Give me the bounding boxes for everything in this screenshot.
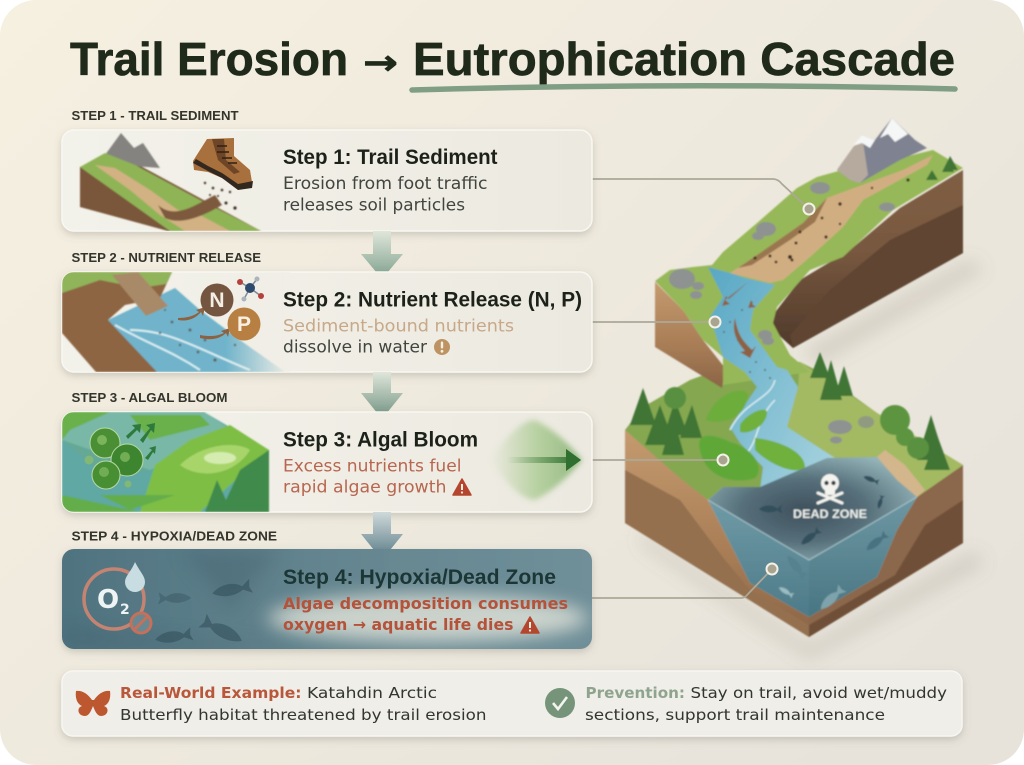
panel: step 2 nutrient release: [62, 272, 592, 372]
trees: [630, 156, 958, 470]
label: step 2: STEP 2 - NUTRIENT RELEASE: [72, 251, 261, 265]
thumbnail: algae water: [62, 412, 269, 512]
panel: step 4 hypoxia: [62, 549, 592, 649]
panel: step 3 algal bloom: rapid algae growth: [283, 478, 446, 496]
icon: oxygen depleted: O: [97, 585, 119, 615]
icon: nitrogen: N: [209, 289, 225, 312]
panel: example and prevention: [62, 671, 962, 736]
lower block: soil faces: [625, 430, 963, 637]
icon: oxygen depleted: 2: [120, 602, 130, 618]
mountain: [837, 118, 927, 183]
dead zone mark: DEAD ZONE: [793, 509, 867, 521]
heading and text: Step 4: Hypoxia/Dead Zone: [283, 566, 556, 589]
icon: nitrogen: [200, 284, 234, 316]
prevention text: sections, support trail maintenance: [585, 706, 885, 724]
arrow: step 3 to 4: [361, 512, 403, 560]
prevention text: Prevention:: [586, 684, 685, 702]
example text: Butterfly habitat threatened by trail erosion: [120, 706, 486, 724]
title: →: [363, 43, 398, 83]
prevention text: Stay on trail, avoid wet/muddy: [690, 684, 947, 702]
river: [708, 267, 835, 490]
icon: algae cells: [84, 428, 143, 489]
label: step 3: STEP 3 - ALGAL BLOOM: [72, 391, 228, 405]
panel: step 3 algal bloom: [62, 412, 592, 512]
upper block: grass surface: [655, 150, 963, 385]
eroded trail: [730, 155, 933, 283]
sediment specks: [754, 178, 910, 263]
example text: Katahdin Arctic: [307, 684, 437, 702]
panel: step 4 hypoxia: Algae decomposition consumes: [283, 594, 568, 613]
lake front faces: [708, 497, 917, 617]
arrow: step 2 to 3: [361, 372, 403, 419]
thumbnail: sediment in water: [62, 272, 290, 372]
dead zone mark: [793, 474, 867, 521]
icon: butterfly: [76, 691, 110, 716]
panel: step 1 trail sediment: Erosion from foot traffic: [283, 174, 488, 193]
connector dots: [710, 204, 814, 574]
heading and text: Step 1: Trail Sediment: [283, 146, 498, 169]
panel: step 4 hypoxia: oxygen → aquatic life dies: [283, 615, 514, 634]
example text: [120, 684, 486, 724]
upper block: soil faces: [655, 170, 963, 388]
icon: phosphorus: [228, 308, 260, 340]
icon: growth arrows: [126, 423, 156, 460]
title: Eutrophication Cascade: [413, 33, 955, 85]
panel: step 1 trail sediment: [62, 130, 592, 231]
lower block: grass surface: [625, 362, 963, 500]
flow arrows: [722, 282, 768, 358]
thumbnail: eroding slope: [80, 133, 261, 231]
example text: Real-World Example:: [120, 684, 302, 702]
arrow: step 1 to 2: [361, 231, 403, 279]
icon: molecule: [237, 276, 264, 302]
algae patches: [699, 391, 830, 490]
lake surface: [708, 457, 917, 560]
terrain diagram: [625, 118, 985, 660]
panel: step 3 algal bloom: Excess nutrients fuel: [283, 456, 462, 476]
icon: warning triangle: [453, 479, 471, 495]
icon: warning triangle: [521, 617, 539, 633]
panel: step 2 nutrient release: Sediment-bound nutrients: [283, 316, 514, 336]
fish silhouettes: [154, 579, 253, 648]
panel: step 1 trail sediment: releases soil particles: [283, 196, 465, 214]
title: [70, 33, 955, 90]
rocks: [669, 182, 895, 444]
connector lines: [592, 179, 809, 598]
icon: oxygen depleted: [84, 562, 151, 633]
heading and text: Step 3: Algal Bloom: [283, 428, 478, 452]
label: step 4: STEP 4 - HYPOXIA/DEAD ZONE: [72, 530, 277, 544]
terrain shadow: [640, 258, 985, 660]
title: Trail Erosion: [70, 33, 348, 85]
icon: check: [545, 688, 575, 718]
heading and text: Step 2: Nutrient Release (N, P): [283, 288, 582, 312]
fish: [759, 474, 890, 613]
green plume arrow: [490, 420, 582, 500]
icon: caution: [434, 339, 450, 355]
prevention text: [585, 684, 947, 724]
label: step 1: STEP 1 - TRAIL SEDIMENT: [72, 109, 239, 123]
panel: step 2 nutrient release: dissolve in water: [283, 338, 427, 356]
icon: hiking boot: [193, 138, 253, 190]
icon: phosphorus: P: [237, 313, 251, 336]
